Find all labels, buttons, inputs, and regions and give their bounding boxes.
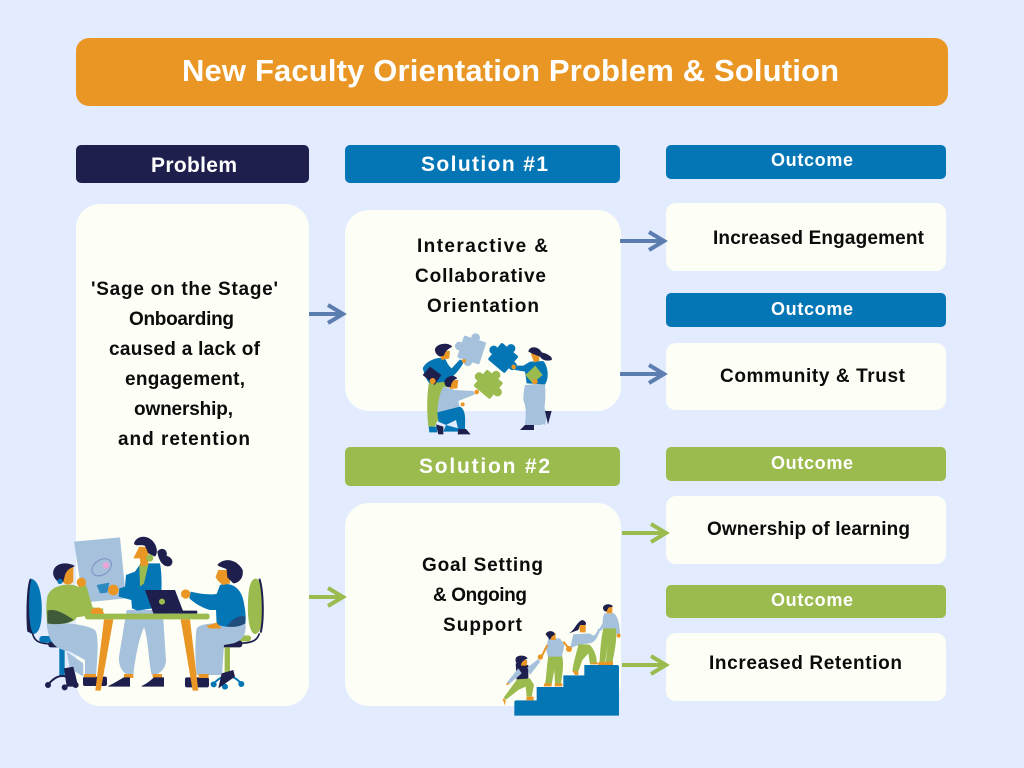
outcome 1: increased engagement: Increased Engagement bbox=[713, 228, 925, 249]
outcome 3: ownership of learning bbox=[666, 447, 946, 564]
heading: Solution #2 bbox=[345, 447, 620, 486]
stairs bbox=[514, 665, 619, 716]
outcome 3: ownership of learning: Outcome bbox=[771, 453, 853, 473]
arrow: problem to solution 2 bbox=[309, 588, 343, 606]
solution 1 text: Interactive & bbox=[417, 236, 548, 257]
panel: solution 1 bbox=[345, 210, 621, 411]
problem description text: 'Sage on the Stage' bbox=[91, 279, 278, 300]
title banner bbox=[76, 38, 948, 106]
climber 3 bbox=[570, 628, 600, 648]
climber 1 bbox=[516, 663, 528, 680]
board bbox=[74, 537, 126, 603]
heading: Solution #1 bbox=[345, 145, 620, 183]
solution 1 text: Orientation bbox=[427, 296, 539, 317]
woman with folder bbox=[523, 383, 545, 425]
problem description text bbox=[91, 279, 278, 450]
arrow: solution 2 to ownership bbox=[622, 524, 666, 542]
title banner: New Faculty Orientation Problem & Solution bbox=[182, 53, 839, 88]
illustration: team meeting at a table bbox=[27, 537, 263, 691]
puzzle piece: light blue bbox=[450, 328, 488, 369]
puzzle piece: dark blue bbox=[483, 334, 527, 377]
solution 2 text: Goal Setting bbox=[422, 555, 543, 576]
arrow: problem to solution 1 bbox=[309, 305, 343, 323]
illustration: people climbing stairs bbox=[502, 604, 621, 716]
arrow: solution 1 to engagement bbox=[620, 232, 664, 250]
problem description text: Onboarding bbox=[129, 309, 234, 330]
heading: Problem: Problem bbox=[151, 154, 237, 177]
outcome 1: increased engagement: Outcome bbox=[771, 150, 853, 170]
problem description text: ownership, bbox=[134, 399, 233, 420]
outcome 1: increased engagement bbox=[666, 145, 946, 271]
solution 2 text: & Ongoing bbox=[433, 585, 527, 606]
puzzle piece: green bbox=[469, 361, 511, 403]
solution 2 text bbox=[422, 555, 543, 636]
outcome 2: community and trust: Outcome bbox=[771, 299, 853, 319]
illustration: team assembling puzzle pieces bbox=[423, 328, 552, 434]
left chair bbox=[27, 579, 42, 634]
outcome 2: community and trust: Community & Trust bbox=[720, 366, 906, 387]
outcome 4: increased retention: Outcome bbox=[771, 590, 853, 610]
heading: Solution #1: Solution #1 bbox=[421, 153, 548, 176]
problem description text: caused a lack of bbox=[109, 339, 261, 360]
solution 1 text bbox=[415, 236, 548, 317]
panel: problem bbox=[76, 204, 309, 706]
laptop bbox=[145, 590, 184, 613]
panel: solution 2 bbox=[345, 503, 621, 706]
climber 4 bbox=[603, 613, 620, 634]
outcome 4: increased retention: Increased Retention bbox=[709, 653, 902, 674]
left person bbox=[47, 623, 98, 675]
solution 1 text: Collaborative bbox=[415, 266, 546, 287]
outcome 4: increased retention bbox=[666, 585, 946, 701]
man standing bbox=[427, 380, 447, 427]
standing person bbox=[119, 610, 166, 675]
arrow: solution 2 to retention bbox=[622, 656, 666, 674]
arrow: solution 1 to community bbox=[620, 365, 664, 383]
problem description text: and retention bbox=[118, 429, 250, 450]
problem description text: engagement, bbox=[125, 369, 245, 390]
heading: Solution #2: Solution #2 bbox=[419, 455, 550, 478]
right person bbox=[195, 623, 246, 675]
outcome 3: ownership of learning: Ownership of learning bbox=[707, 519, 910, 540]
heading: Problem bbox=[76, 145, 309, 183]
table bbox=[95, 619, 113, 691]
climber 2 bbox=[546, 638, 564, 658]
crouching man bbox=[437, 387, 475, 412]
solution 2 text: Support bbox=[443, 615, 523, 636]
right chair bbox=[248, 579, 263, 634]
outcome 2: community and trust bbox=[666, 293, 946, 410]
